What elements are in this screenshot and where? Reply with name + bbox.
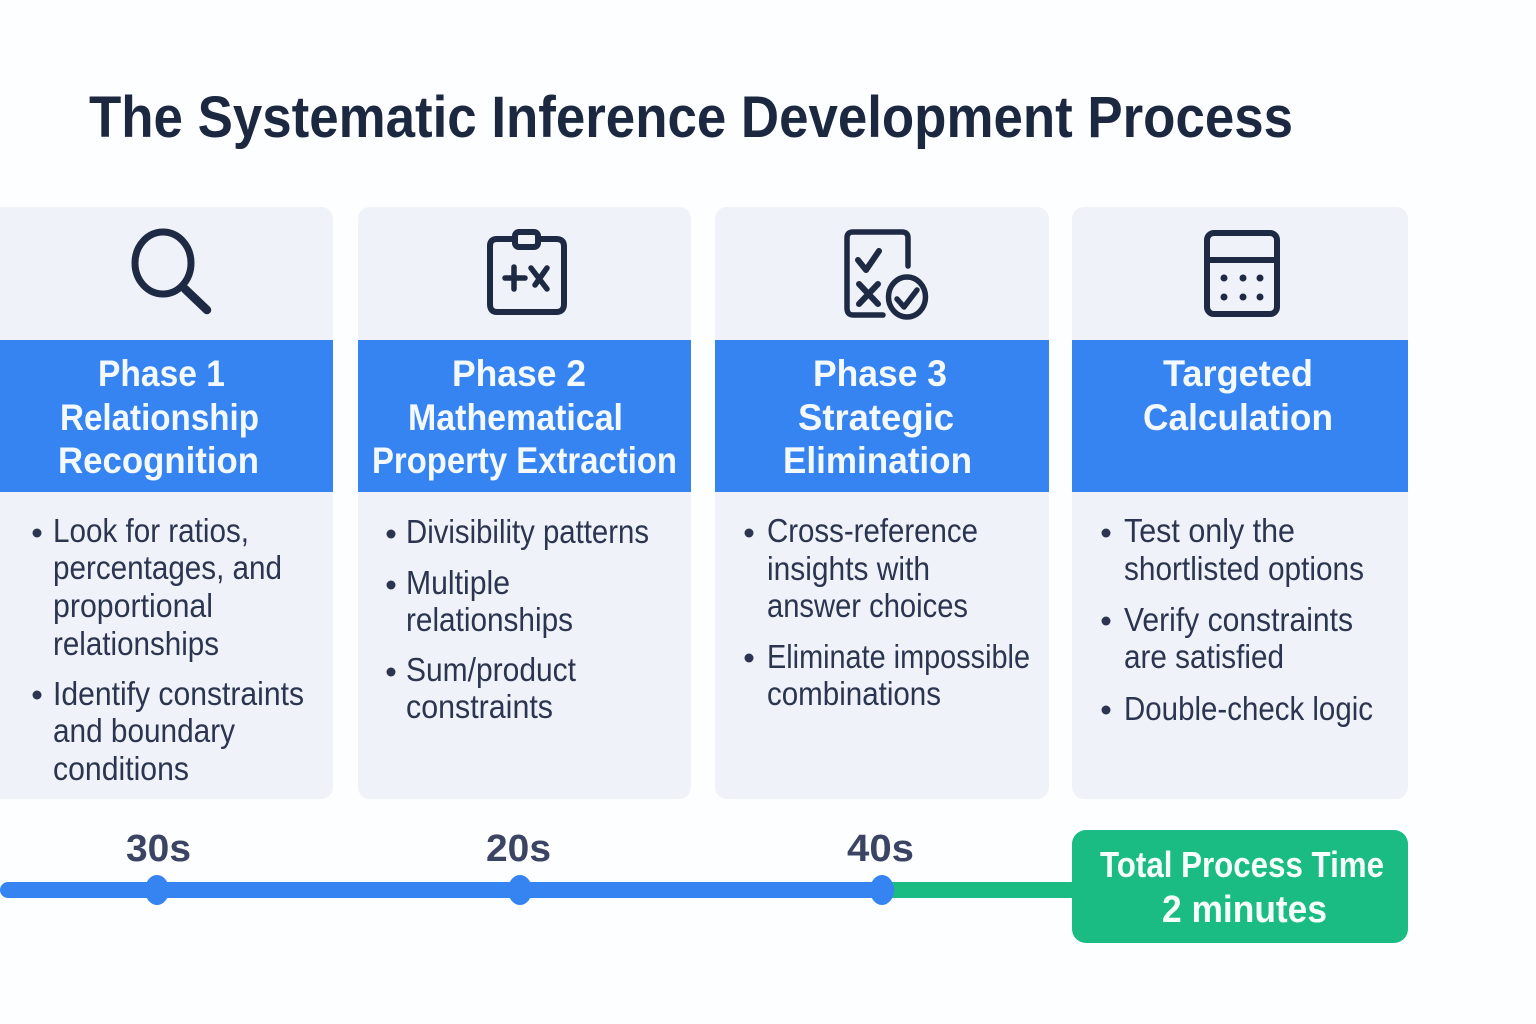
phase 2 bullets: Sum/product xyxy=(406,651,576,688)
panel: phase 3 xyxy=(715,207,1049,799)
phase 1 bullets: Identify constraints xyxy=(53,675,304,712)
phase 1 bullets: conditions xyxy=(53,750,189,787)
phase 2 bullets: Multiple xyxy=(406,564,510,601)
callout: total process time xyxy=(1072,830,1408,943)
panel: targeted calculation xyxy=(1072,207,1408,799)
title: The Systematic Inference Development Process xyxy=(89,85,1293,150)
phase 3 header: Elimination xyxy=(783,440,972,481)
phase 1 header: Recognition xyxy=(58,440,259,481)
phase 3 header: Strategic xyxy=(798,397,954,438)
phase 2 header: Mathematical xyxy=(408,397,623,438)
time label: phase 1: 30s xyxy=(126,828,191,870)
phase 2 header: Phase 2 xyxy=(452,353,586,394)
phase 1 bullets: percentages, and xyxy=(53,549,282,586)
phase 3 bullets: Eliminate impossible xyxy=(767,638,1030,675)
phase 2 bullets: relationships xyxy=(406,601,573,638)
phase 3 bullets: Cross-reference xyxy=(767,512,978,549)
phase 1 bullets: relationships xyxy=(53,625,219,662)
phase 1 bullets xyxy=(32,512,304,787)
targeted calculation bullets: Verify constraints xyxy=(1124,601,1353,638)
phase 2 header xyxy=(358,340,691,492)
phase 1 bullets: and boundary xyxy=(53,712,235,749)
phase 1 header: Phase 1 xyxy=(98,353,225,394)
targeted calculation header: Targeted xyxy=(1163,353,1313,394)
targeted calculation bullets: are satisfied xyxy=(1124,638,1284,675)
phase 1 header: Relationship xyxy=(60,397,259,438)
phase 3 bullets: insights with xyxy=(767,550,930,587)
timeline xyxy=(0,828,1080,905)
time label: phase 3: 40s xyxy=(847,828,914,870)
phase 2 bullets xyxy=(386,513,649,725)
panel: phase 1 xyxy=(0,207,333,799)
panel: phase 2 xyxy=(358,207,691,799)
phase 2 bullets: constraints xyxy=(406,688,553,725)
phase 3 header: Phase 3 xyxy=(813,353,947,394)
phase 3 bullets xyxy=(744,512,1030,712)
phase 2 bullets: Divisibility patterns xyxy=(406,513,649,550)
targeted calculation bullets: shortlisted options xyxy=(1124,550,1364,587)
callout: total process time: Total Process Time xyxy=(1100,844,1384,885)
phase 2 header: Property Extraction xyxy=(372,440,677,481)
callout: total process time: 2 minutes xyxy=(1162,889,1327,931)
targeted calculation bullets xyxy=(1102,512,1373,727)
time label: phase 2: 20s xyxy=(486,828,551,870)
targeted calculation header: Calculation xyxy=(1143,397,1333,438)
targeted calculation bullets: Double-check logic xyxy=(1124,690,1373,727)
phase 3 bullets: combinations xyxy=(767,675,941,712)
phase 3 header xyxy=(715,340,1049,492)
icon: checklist with check badge xyxy=(847,232,926,317)
icon: magnifying glass xyxy=(135,232,207,310)
targeted calculation bullets: Test only the xyxy=(1124,512,1295,549)
phase 1 header xyxy=(0,340,333,492)
phase 1 bullets: proportional xyxy=(53,587,213,624)
phase 1 bullets: Look for ratios, xyxy=(53,512,249,549)
phase 3 bullets: answer choices xyxy=(767,587,968,624)
icon: calculator xyxy=(1207,233,1277,314)
targeted calculation header xyxy=(1072,340,1408,492)
icon: clipboard with math symbols xyxy=(490,232,564,312)
